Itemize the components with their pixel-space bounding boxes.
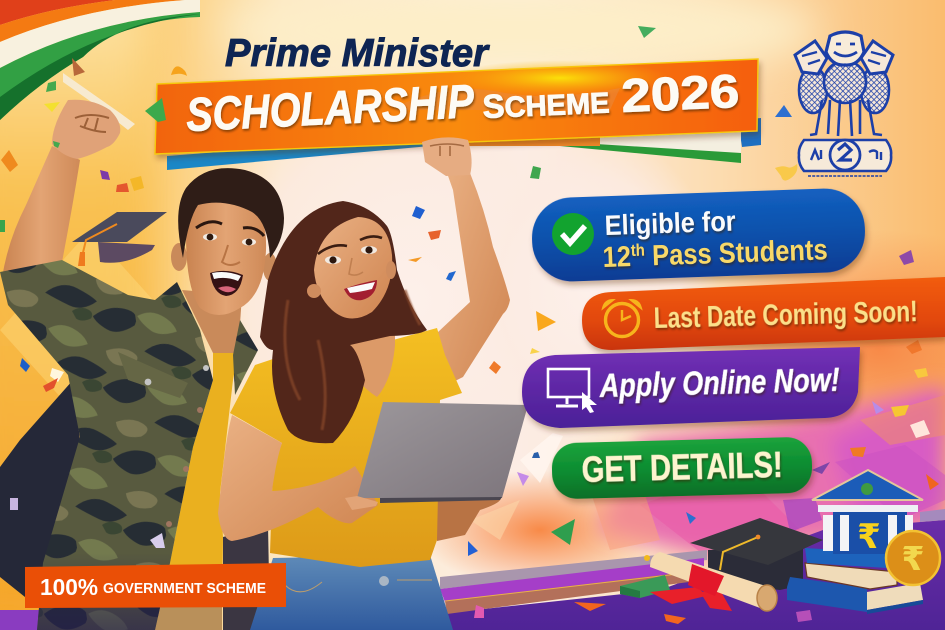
- badge: government scheme: 100%: [40, 574, 98, 600]
- woman fist over the banner edge: [422, 137, 472, 176]
- neck: [182, 290, 242, 353]
- title text: SCHEME: [482, 82, 610, 125]
- yellow tee: [157, 353, 238, 607]
- base: [799, 140, 891, 171]
- face: [307, 217, 396, 319]
- title text: [185, 64, 740, 141]
- button: get details: [551, 437, 813, 499]
- pill: eligibility: [531, 187, 866, 283]
- laptop: [357, 402, 528, 503]
- yellow tee: [230, 328, 462, 567]
- badge: government scheme: GOVERNMENT SCHEME: [103, 581, 266, 597]
- raised arm: [437, 173, 510, 387]
- graduation cap: left floating: [72, 212, 167, 266]
- graduation cap: [690, 518, 823, 590]
- eligibility text: th: [630, 241, 645, 260]
- fist: [52, 100, 120, 159]
- rupee coin: ₹: [902, 540, 924, 577]
- head: [171, 168, 284, 315]
- icon: monitor and cursor: [548, 369, 597, 413]
- icon: national emblem: [795, 32, 893, 176]
- side lions: [795, 32, 893, 113]
- book stack: [787, 548, 923, 614]
- diploma scroll: [644, 552, 777, 611]
- chest and neck: [340, 312, 395, 397]
- pink patches: [600, 385, 945, 555]
- camo jacket: [0, 260, 270, 630]
- rupee coin: [886, 531, 940, 585]
- student: man: [0, 100, 284, 630]
- icon: check: [552, 213, 594, 255]
- student: woman: [218, 173, 528, 630]
- title text: SCHOLARSHIP: [185, 74, 476, 141]
- pill: apply online: [522, 347, 860, 428]
- badge: government scheme: [25, 563, 286, 608]
- hair: [178, 168, 284, 258]
- button: get details: GET DETAILS!: [581, 444, 783, 490]
- bank building: ₹: [857, 518, 881, 556]
- title: Prime Minister: Prime Minister: [225, 32, 490, 75]
- green box: [620, 575, 670, 598]
- eligibility text: [602, 205, 828, 274]
- title banner: [145, 59, 761, 170]
- bank building: [812, 470, 923, 556]
- pill: apply online: Apply Online Now!: [598, 361, 840, 404]
- forearm behind laptop: [437, 495, 501, 541]
- eligibility text: 12: [602, 241, 635, 274]
- pill: last date: [582, 277, 945, 350]
- jeans: [250, 555, 453, 630]
- open mouth: [210, 271, 243, 296]
- hair: [260, 201, 427, 443]
- icon: alarm clock: [603, 300, 641, 336]
- title text: 2026: [620, 64, 740, 122]
- eligibility text: Eligible for: [604, 205, 736, 241]
- brows and eyes: [196, 222, 264, 236]
- eligibility text: Pass Students: [645, 234, 828, 273]
- raised arm: [2, 146, 80, 278]
- illustration: cap, scroll, books, bank: [620, 470, 940, 614]
- tricolor ribbon: [0, 0, 200, 120]
- fingers: [345, 496, 378, 510]
- backpack: [0, 380, 80, 600]
- banner ribbons: [167, 118, 761, 170]
- pillar legs: [810, 100, 882, 136]
- floor strip: [447, 520, 945, 630]
- arm and hand holding laptop: [218, 415, 378, 541]
